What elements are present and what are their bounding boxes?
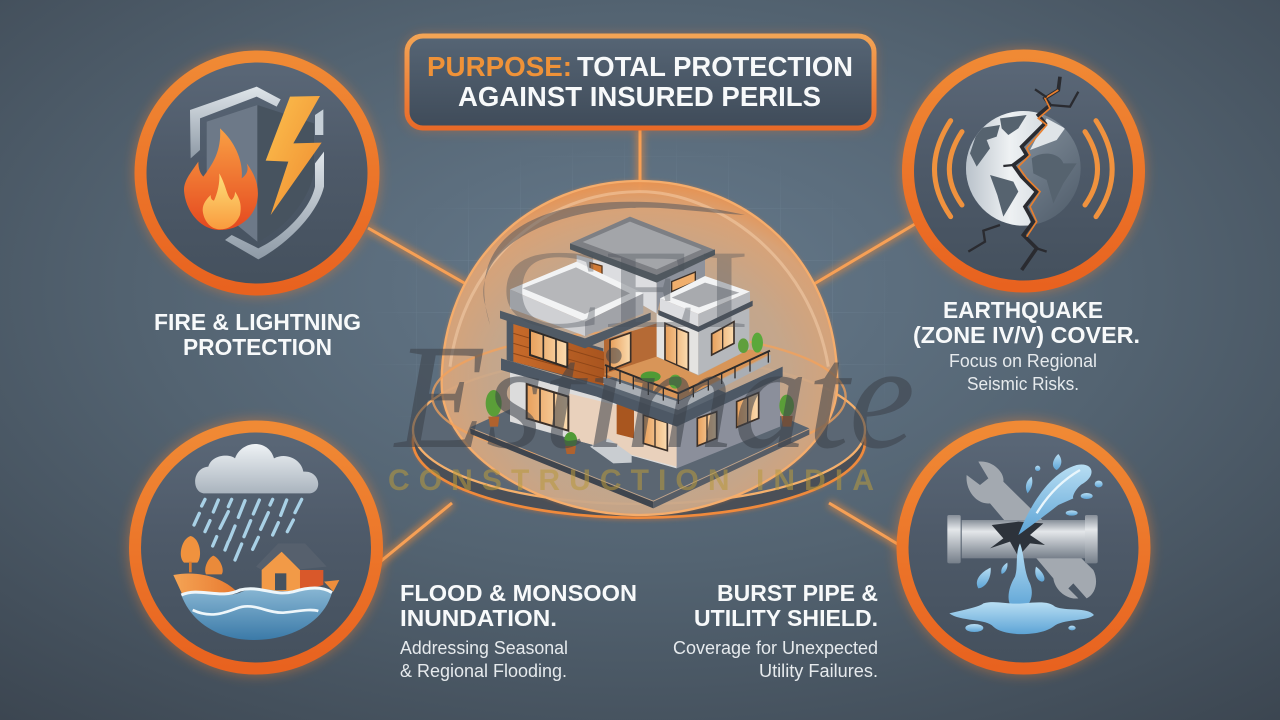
label: earthquake: EARTHQUAKE xyxy=(943,297,1103,323)
platform xyxy=(412,356,866,520)
icon ring: fire xyxy=(134,50,380,296)
icon: cracked globe with seismic waves xyxy=(934,77,1112,270)
watermark logo: CEI xyxy=(500,228,750,352)
description: burst pipe: Utility Failures. xyxy=(759,661,878,681)
label: flood: FLOOD & MONSOON xyxy=(400,580,637,606)
label: burst pipe: UTILITY SHIELD. xyxy=(694,605,878,631)
label: flood: INUNDATION. xyxy=(400,605,557,631)
upper wall and top roof xyxy=(577,255,657,313)
potted shrubs xyxy=(486,390,794,454)
label: burst pipe: BURST PIPE & xyxy=(717,580,878,606)
connector lines xyxy=(368,130,915,566)
balcony xyxy=(603,333,771,410)
right terrace xyxy=(658,276,753,332)
description: earthquake: Seismic Risks. xyxy=(967,374,1079,394)
mid slab xyxy=(501,358,783,427)
description: burst pipe: Coverage for Unexpected xyxy=(673,638,878,658)
watermark logo: Estimate xyxy=(393,314,915,480)
icon ring: burst pipe xyxy=(896,420,1152,676)
label: earthquake: (ZONE IV/V) COVER. xyxy=(913,322,1140,348)
house xyxy=(470,217,809,508)
central dome and house xyxy=(412,181,866,520)
watermark logo: CONSTRUCTION INDIA xyxy=(388,464,874,497)
description: earthquake: Focus on Regional xyxy=(949,351,1097,371)
label: fire and lightning: FIRE & LIGHTNING xyxy=(154,309,361,335)
watermark logo xyxy=(388,202,915,497)
icon ring: earthquake xyxy=(902,49,1146,293)
left terrace xyxy=(500,262,651,348)
panel: burst pipe xyxy=(673,420,1152,681)
title text: PURPOSE: xyxy=(427,51,572,82)
title text: AGAINST INSURED PERILS xyxy=(458,81,821,112)
panel: earthquake xyxy=(902,49,1146,394)
label: fire and lightning: PROTECTION xyxy=(183,334,332,360)
icon: shield, flame and bolt xyxy=(184,87,324,259)
title text: TOTAL PROTECTION xyxy=(577,51,853,82)
icon: burst pipe, wrench and water xyxy=(947,454,1103,634)
title box xyxy=(406,35,875,130)
glass dome xyxy=(432,181,846,515)
description: flood: Addressing Seasonal xyxy=(400,638,568,658)
panel: fire and lightning xyxy=(134,50,380,360)
icon ring: flood xyxy=(128,420,384,676)
panel: flood xyxy=(128,420,643,681)
description: flood: & Regional Flooding. xyxy=(400,661,567,681)
ground floor xyxy=(510,372,780,468)
base slab xyxy=(470,353,809,508)
upper floor wood wall xyxy=(507,320,603,387)
icon: cloud, rain, house and flood water xyxy=(173,444,339,640)
